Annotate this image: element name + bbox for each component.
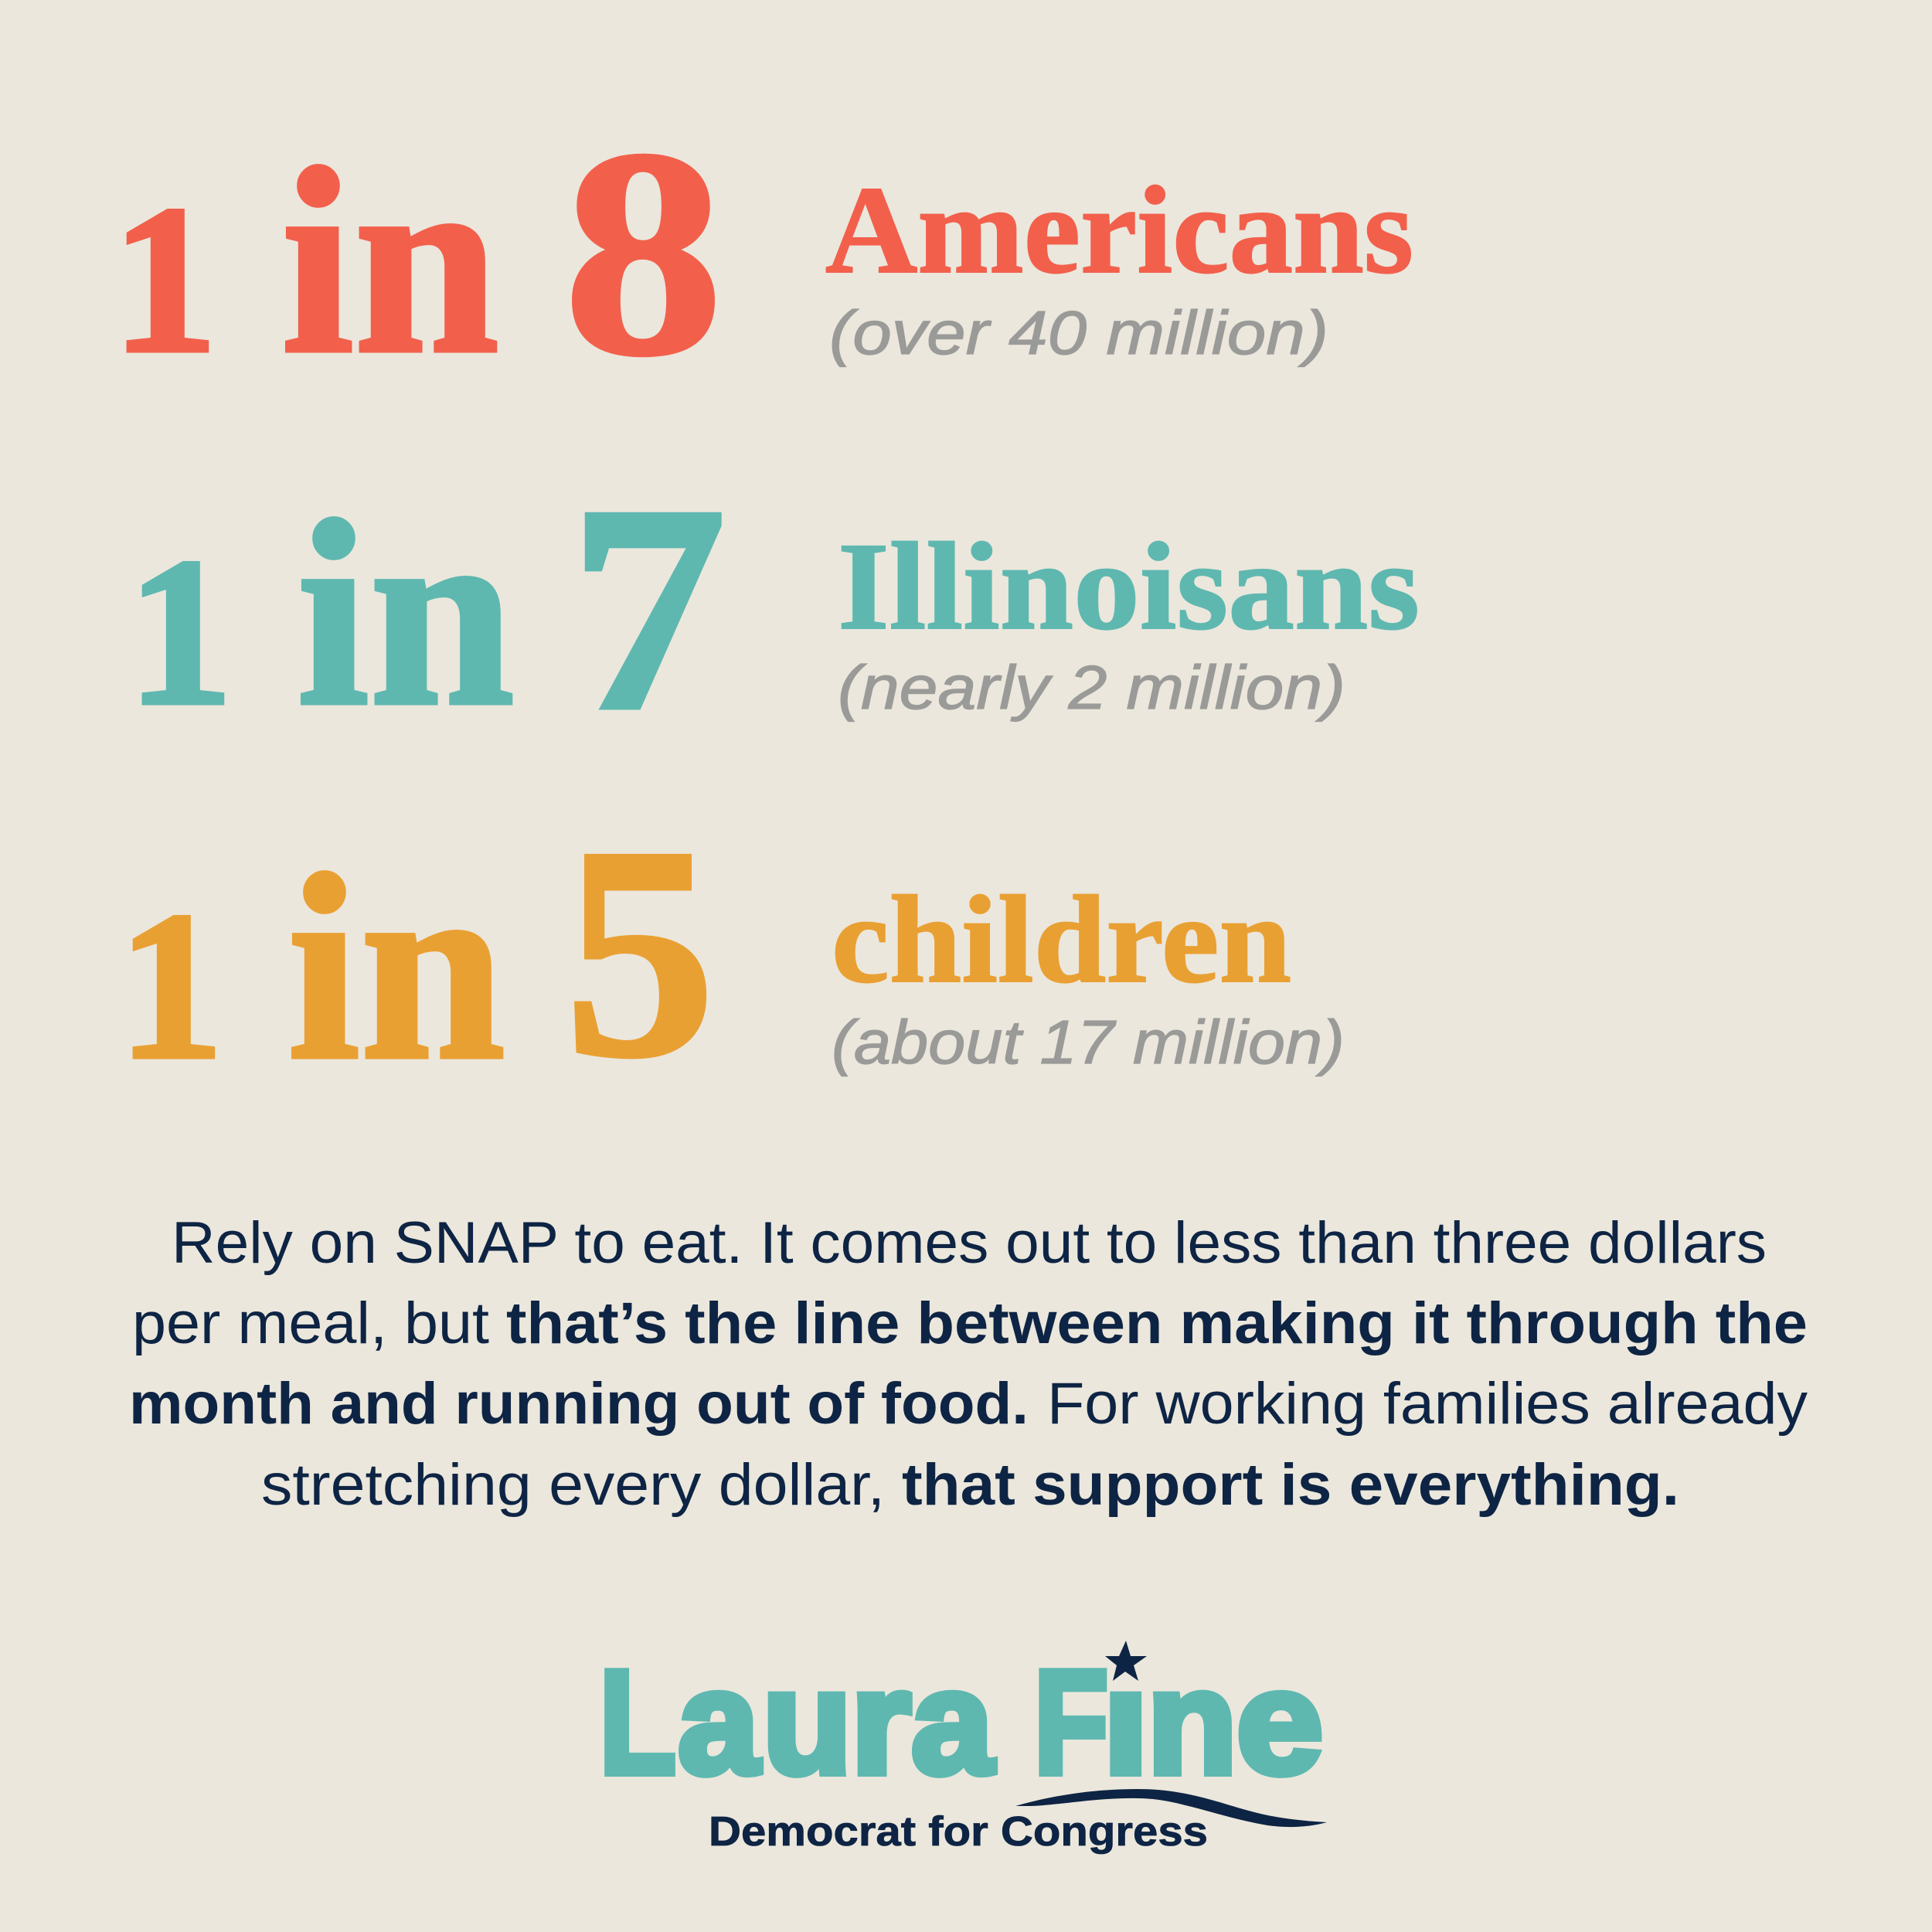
logo wordmark: F <box>1034 1641 1108 1804</box>
statistic: 1 in 5: in <box>287 820 505 1115</box>
statistic: 1 in 7: in <box>297 466 515 761</box>
row: 1 in 8 Americans <box>111 89 1413 417</box>
statistic: 1 in 5 <box>117 784 716 1120</box>
label: children: children <box>832 871 1291 1009</box>
icon: swoosh <box>1015 1789 1327 1827</box>
logo wordmark: L <box>600 1641 676 1804</box>
logo wordmark: e <box>1236 1641 1323 1804</box>
paragraph: SNAP explanation: that support is everything. <box>902 1452 1679 1518</box>
paragraph: SNAP explanation: For working families already <box>1047 1371 1808 1437</box>
statistic: 1 in 8: 1 <box>111 162 218 397</box>
logo wordmark <box>600 1641 1323 1804</box>
paragraph: SNAP explanation <box>129 1210 1808 1518</box>
logo wordmark: a <box>911 1641 994 1804</box>
logo wordmark: a <box>679 1641 760 1804</box>
sublabel: nearly 2 million: (nearly 2 million) <box>838 653 1345 722</box>
statistic: 1 in 8: 8 <box>563 89 723 417</box>
logo tagline: Democrat for Congress <box>709 1808 1208 1855</box>
mask over the i dot <box>1110 1638 1145 1688</box>
icon: star <box>1105 1641 1147 1681</box>
statistic: 1 in 8: in <box>281 114 499 409</box>
statistic: 1 in 7: 1 <box>127 515 233 750</box>
logo wordmark: i <box>1103 1641 1149 1804</box>
sublabel: about 17 million: (about 17 million) <box>832 1008 1345 1077</box>
statistic: 1 in 8 <box>111 89 723 417</box>
statistic: 1 in 7: 7 <box>569 444 727 772</box>
label: Americans: Americans <box>825 162 1413 300</box>
paragraph: SNAP explanation: per meal, but <box>132 1291 489 1356</box>
row: 1 in 5 children <box>117 784 1345 1120</box>
sublabel: over 40 million: (over 40 million) <box>829 298 1328 367</box>
label: Illinoisans: Illinoisans <box>838 518 1420 656</box>
logo wordmark: u <box>763 1641 852 1804</box>
statistic: 1 in 5: 5 <box>564 784 716 1120</box>
logo wordmark: n <box>1148 1641 1237 1804</box>
logo: Laura Fine <box>600 1638 1327 1855</box>
statistic: 1 in 5: 1 <box>117 869 224 1104</box>
paragraph: SNAP explanation: that’s the line between making it through the <box>506 1291 1808 1356</box>
logo wordmark: r <box>851 1641 911 1804</box>
paragraph: SNAP explanation: Rely on SNAP to eat. It comes out to less than three dollars <box>172 1210 1767 1276</box>
statistic: 1 in 7 <box>127 444 727 772</box>
paragraph: SNAP explanation: month and running out of food. <box>129 1371 1029 1437</box>
row: 1 in 7 Illinoisans <box>127 444 1420 772</box>
paragraph: SNAP explanation: stretching every dollar, <box>261 1452 885 1518</box>
